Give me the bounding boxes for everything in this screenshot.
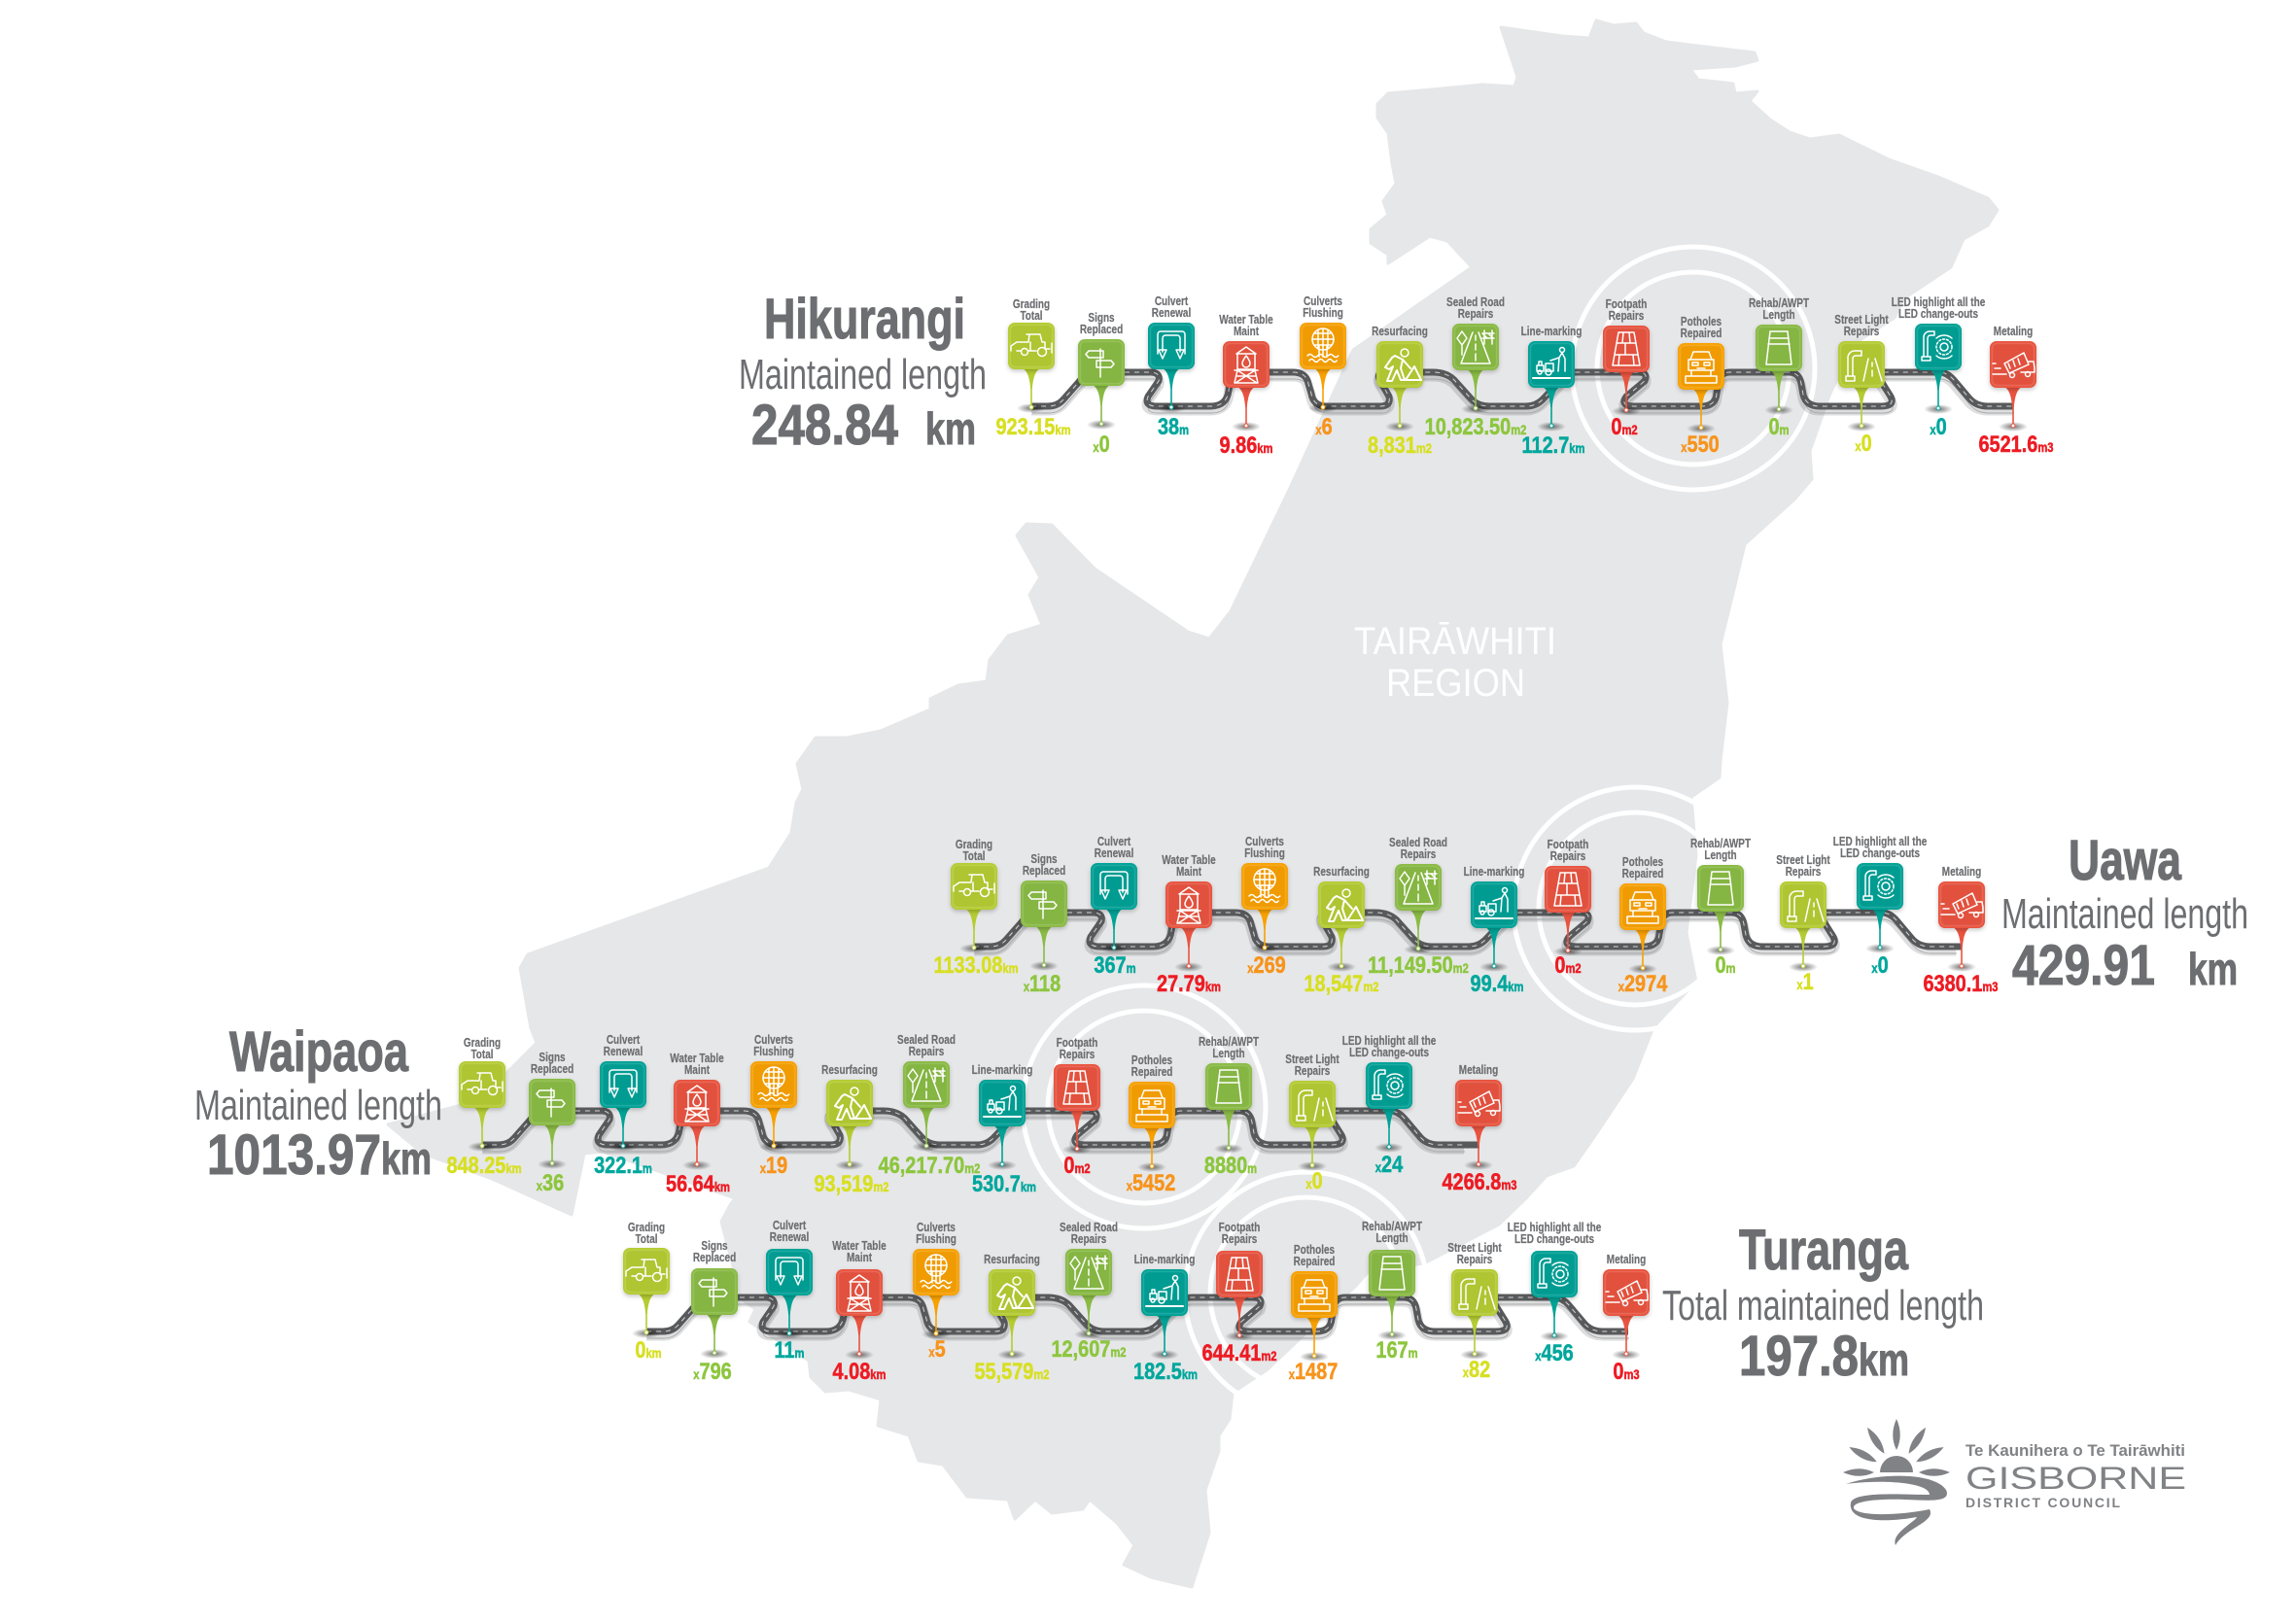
pin: Potholes Repaired: Repaired: [1131, 1066, 1172, 1079]
pin: Sealed Road Repairs: Sealed Road: [897, 1034, 956, 1047]
pin: Culvert Renewal: Renewal: [1095, 847, 1133, 860]
pin: Potholes Repaired: Potholes: [1131, 1054, 1172, 1067]
pin: Rehab/AWPT Length: Rehab/AWPT: [1690, 838, 1751, 850]
pin: Culverts Flushing: [750, 1034, 797, 1178]
pin: Culverts Flushing: Culverts: [917, 1222, 956, 1234]
pin: Metaling: Metaling: [1459, 1064, 1498, 1077]
pin: Culverts Flushing: x6: [1315, 413, 1333, 439]
pin: LED highlight: LED highlight all the: [1892, 296, 1985, 309]
pin: Sealed Road Repairs: 12,607m2: [1051, 1335, 1127, 1362]
pin: Signs Replaced: [529, 1052, 575, 1195]
pin: Grading Total: Total: [635, 1233, 658, 1246]
pin: Potholes Repaired: [1678, 316, 1724, 457]
pin: Grading Total: 0km: [635, 1336, 662, 1363]
pin: Metaling: [1978, 326, 2054, 457]
logo: Gisborne District Council: DISTRICT COUNCIL: [1966, 1495, 2120, 1510]
pin: Potholes Repaired: Repaired: [1294, 1256, 1335, 1268]
pin: Metaling: 0m3: [1613, 1358, 1640, 1384]
pin: Rehab/AWPT Length: Rehab/AWPT: [1362, 1221, 1422, 1233]
pin: Footpath Repairs: 644.41m2: [1201, 1339, 1277, 1365]
pin: Sealed Road Repairs: Repairs: [1458, 308, 1493, 321]
pin: Grading Total: [623, 1222, 670, 1363]
pin: Potholes Repaired: x2974: [1618, 970, 1668, 996]
pin: Footpath Repairs: Repairs: [1609, 310, 1644, 323]
pin: Signs Replaced: [1021, 853, 1067, 996]
pin: Signs Replaced: Signs: [1030, 853, 1058, 866]
pin: Line-marking: [1464, 866, 1524, 996]
pin: Resurfacing: 55,579m2: [974, 1358, 1050, 1384]
pin: Footpath Repairs: Footpath: [1606, 298, 1647, 311]
pin: Signs Replaced: x118: [1024, 970, 1061, 996]
pin: Signs Replaced: Signs: [1088, 312, 1115, 325]
pin: Water Table Maint: Water Table: [670, 1053, 724, 1065]
pin: Sealed Road Repairs: Repairs: [1401, 848, 1436, 861]
pin: Potholes Repaired: x1487: [1289, 1358, 1338, 1384]
pin: Rehab/AWPT Length: 8880m: [1204, 1152, 1257, 1178]
pin: Sealed Road Repairs: Sealed Road: [1389, 837, 1447, 849]
logo: Gisborne District Council: [1843, 1419, 2186, 1545]
pin: Resurfacing: 8,831m2: [1368, 432, 1432, 458]
heading: Hikurangi: Hikurangi: [764, 288, 965, 351]
pin: LED highlight: x456: [1535, 1339, 1574, 1365]
pin: Rehab/AWPT Length: Length: [1762, 309, 1795, 322]
pin: Rehab/AWPT Length: [1199, 1036, 1259, 1178]
pin: Sealed Road Repairs: [1051, 1222, 1127, 1362]
pin: LED highlight: LED highlight all the: [1508, 1222, 1601, 1234]
pin: Culverts Flushing: Flushing: [1244, 847, 1285, 860]
pin: Potholes Repaired: Potholes: [1622, 856, 1663, 869]
pin: LED highlight: x0: [1930, 413, 1947, 439]
pin: Potholes Repaired: Repaired: [1622, 868, 1663, 881]
pin: Culverts Flushing: Culverts: [1304, 295, 1342, 308]
pin: Metaling: Metaling: [1994, 326, 2033, 338]
pin: Culvert Renewal: Culvert: [607, 1034, 640, 1047]
heading: Turanga: [1662, 1219, 1984, 1388]
pin: Rehab/AWPT Length: 0m: [1715, 951, 1736, 978]
region label: REGION: [1386, 662, 1525, 705]
heading: Turanga: km: [1859, 1334, 1909, 1385]
pin: Street Light Repairs: Street Light: [1285, 1053, 1339, 1066]
pin: Sealed Road Repairs: Repairs: [909, 1046, 944, 1058]
heading: Hikurangi: 248.84: [751, 394, 898, 457]
pin: Street Light Repairs: [1285, 1053, 1339, 1193]
pin: Culverts Flushing: Culverts: [1245, 836, 1284, 848]
pin: Street Light Repairs: [1447, 1242, 1502, 1382]
pin: Water Table Maint: Water Table: [832, 1240, 887, 1253]
pin: Water Table Maint: 56.64km: [666, 1170, 730, 1196]
region label: [1354, 620, 1556, 705]
pin: Resurfacing: Resurfacing: [1372, 326, 1428, 338]
pin: Line-marking: 530.7km: [972, 1170, 1036, 1196]
heading: Hikurangi: km: [925, 403, 976, 454]
pin: Grading Total: [995, 298, 1071, 439]
pin: Sealed Road Repairs: Sealed Road: [1446, 296, 1505, 309]
pin: Grading Total: Grading: [956, 839, 992, 851]
pin: Signs Replaced: Replaced: [1023, 865, 1065, 878]
pin: Line-marking: [1133, 1254, 1198, 1384]
pin: Culverts Flushing: Flushing: [753, 1046, 794, 1058]
heading: Hikurangi: Maintained length: [739, 351, 987, 398]
pin: Signs Replaced: Replaced: [1080, 324, 1123, 336]
pin: LED highlight: [1892, 296, 1985, 439]
pin: Potholes Repaired: Potholes: [1294, 1244, 1335, 1257]
pin: Rehab/AWPT Length: [1749, 297, 1809, 439]
icon: sun and river: [1843, 1419, 1950, 1545]
pin: Culvert Renewal: [766, 1220, 813, 1363]
pin: Footpath Repairs: 0m2: [1554, 951, 1582, 978]
pin: LED highlight: [1342, 1035, 1436, 1177]
pin: Culverts Flushing: [1241, 836, 1288, 978]
highlight rings: [1023, 247, 1815, 1415]
pin: Sealed Road Repairs: [1368, 837, 1469, 978]
pin: Culverts Flushing: [1300, 295, 1346, 439]
heading: Waipaoa: Maintained length: [194, 1082, 442, 1129]
pin: Water Table Maint: [1157, 854, 1221, 996]
heading: Uawa: 429.91: [2012, 934, 2155, 997]
pin: Grading Total: [933, 839, 1019, 978]
pin: Culvert Renewal: Renewal: [770, 1231, 809, 1244]
pin: Culvert Renewal: [1091, 836, 1137, 978]
road: Waipaoa: [482, 1111, 1479, 1152]
pin: Culvert Renewal: [594, 1034, 652, 1178]
heading: Uawa: Uawa: [2069, 829, 2182, 892]
pin: Water Table Maint: [666, 1053, 730, 1196]
road: Turanga: [646, 1297, 1629, 1338]
pin: Resurfacing: 93,519m2: [814, 1170, 889, 1196]
pin: LED highlight: LED change-outs: [1840, 847, 1920, 860]
pin: LED highlight: LED highlight all the: [1833, 836, 1927, 848]
pin: Grading Total: 848.25km: [446, 1152, 522, 1178]
pin: Sealed Road Repairs: [879, 1034, 980, 1178]
pin: Grading Total: Total: [962, 850, 986, 863]
pin: Grading Total: Total: [1020, 310, 1043, 323]
pin: Footpath Repairs: Footpath: [1548, 839, 1588, 851]
pin: Water Table Maint: [1219, 314, 1273, 458]
pin: Street Light Repairs: Repairs: [1844, 326, 1879, 338]
pin: Metaling: Metaling: [1607, 1254, 1646, 1266]
pin: Metaling: 6380.1m3: [1923, 970, 1999, 996]
pin: Rehab/AWPT Length: Rehab/AWPT: [1749, 297, 1809, 310]
pin: Footpath Repairs: [1545, 839, 1591, 978]
road: Hikurangi: [1031, 372, 2014, 413]
pin: Line-marking: Line-marking: [1134, 1254, 1195, 1266]
pin: Water Table Maint: Maint: [847, 1252, 872, 1264]
pin: Rehab/AWPT Length: Length: [1212, 1048, 1245, 1060]
pin: Potholes Repaired: x5452: [1127, 1169, 1175, 1195]
heading: Waipaoa: [194, 1020, 442, 1187]
pin: LED highlight: LED change-outs: [1898, 308, 1978, 321]
pin: Signs Replaced: Replaced: [693, 1252, 736, 1264]
pin: Metaling: [1923, 866, 1999, 996]
pin: Water Table Maint: 4.08km: [833, 1358, 886, 1384]
pin: Footpath Repairs: [1603, 298, 1650, 439]
pin: Sealed Road Repairs: 46,217.70m2: [879, 1152, 980, 1178]
pin: Culverts Flushing: x269: [1247, 951, 1286, 978]
pin: Footpath Repairs: Repairs: [1060, 1049, 1095, 1061]
pin: Line-marking: [1521, 326, 1584, 458]
strip: Hikurangi: [995, 295, 2054, 458]
pin: Resurfacing: [1368, 326, 1432, 458]
pin: Potholes Repaired: Potholes: [1681, 316, 1722, 328]
pin: Street Light Repairs: x82: [1463, 1356, 1490, 1382]
heading: Uawa: [2001, 829, 2248, 997]
pin: Footpath Repairs: 0m2: [1611, 413, 1638, 439]
pin: Line-marking: Line-marking: [1464, 866, 1524, 879]
pin: Grading Total: Grading: [464, 1037, 501, 1050]
strip: Turanga: [623, 1220, 1650, 1384]
pin: Metaling: Metaling: [1942, 866, 1981, 879]
pin: Signs Replaced: Signs: [539, 1052, 566, 1064]
pin: Line-marking: Line-marking: [972, 1064, 1032, 1077]
heading: Uawa: km: [2188, 944, 2238, 994]
pin: Resurfacing: [1304, 866, 1379, 996]
pin: Resurfacing: [814, 1064, 889, 1196]
pin: Metaling: 6521.6m3: [1978, 431, 2054, 457]
pin: Street Light Repairs: Street Light: [1834, 314, 1889, 327]
pin: LED highlight: LED change-outs: [1349, 1047, 1429, 1059]
pin: Signs Replaced: x796: [693, 1358, 732, 1384]
pin: Grading Total: Grading: [628, 1222, 665, 1234]
pin: Culvert Renewal: 38m: [1158, 413, 1189, 439]
pin: Water Table Maint: Water Table: [1219, 314, 1273, 327]
pin: Sealed Road Repairs: 11,149.50m2: [1368, 951, 1469, 978]
pin: Potholes Repaired: [1618, 856, 1668, 996]
pin: Rehab/AWPT Length: [1690, 838, 1751, 978]
pin: LED highlight: x24: [1375, 1151, 1404, 1177]
pin: Line-marking: 112.7km: [1522, 432, 1584, 458]
pin: Line-marking: 99.4km: [1471, 970, 1523, 996]
pin: Street Light Repairs: [1776, 854, 1830, 994]
heading: Turanga: Turanga: [1739, 1219, 1909, 1282]
region label: TAIRĀWHITI: [1354, 620, 1556, 663]
pin: Culvert Renewal: 322.1m: [594, 1152, 652, 1178]
pin: Culverts Flushing: [913, 1222, 959, 1362]
pin: Rehab/AWPT Length: Length: [1704, 849, 1737, 862]
heading: Waipaoa: km: [381, 1133, 432, 1184]
pin: Metaling: [1603, 1254, 1650, 1384]
road: Uawa: [974, 913, 1962, 953]
pin: Potholes Repaired: [1289, 1244, 1338, 1384]
pin: Resurfacing: Resurfacing: [821, 1064, 878, 1077]
pin: Rehab/AWPT Length: 0m: [1768, 413, 1790, 439]
pin: Culvert Renewal: 11m: [774, 1336, 805, 1363]
pin: Footpath Repairs: Repairs: [1222, 1233, 1257, 1246]
pin: Resurfacing: [974, 1254, 1050, 1384]
pin: Resurfacing: Resurfacing: [984, 1254, 1040, 1266]
pin: Potholes Repaired: Repaired: [1681, 328, 1722, 340]
pin: Street Light Repairs: x0: [1305, 1167, 1323, 1193]
pin: Culvert Renewal: Culvert: [773, 1220, 806, 1232]
pin: Rehab/AWPT Length: [1362, 1221, 1422, 1363]
pin: Water Table Maint: 9.86km: [1220, 432, 1272, 458]
pin: Potholes Repaired: x550: [1681, 431, 1720, 457]
pin: Street Light Repairs: Street Light: [1776, 854, 1830, 867]
pin: Culvert Renewal: Culvert: [1097, 836, 1131, 848]
pin: Metaling: [1442, 1064, 1517, 1194]
pin: Culverts Flushing: x5: [928, 1335, 946, 1362]
pin: Footpath Repairs: Footpath: [1057, 1037, 1097, 1050]
pin: Resurfacing: Resurfacing: [1313, 866, 1370, 879]
pin: Sealed Road Repairs: 10,823.50m2: [1425, 413, 1526, 439]
pin: Culvert Renewal: 367m: [1094, 951, 1136, 978]
pin: Footpath Repairs: Footpath: [1219, 1222, 1260, 1234]
heading: Hikurangi: [739, 288, 987, 457]
pin: Line-marking: 182.5km: [1133, 1358, 1198, 1384]
pin: Culverts Flushing: Culverts: [754, 1034, 793, 1047]
pin: Footpath Repairs: [1201, 1222, 1277, 1365]
pin: LED highlight: [1833, 836, 1927, 978]
pin: LED highlight: LED change-outs: [1514, 1233, 1594, 1246]
pin: Street Light Repairs: x1: [1796, 968, 1814, 994]
pin: Culverts Flushing: Flushing: [916, 1233, 957, 1246]
map: Tairāwhiti region: [388, 20, 1998, 1587]
pin: Culvert Renewal: Culvert: [1155, 295, 1188, 308]
pin: Sealed Road Repairs: [1425, 296, 1526, 439]
pin: Water Table Maint: Maint: [1234, 326, 1259, 338]
pin: Sealed Road Repairs: Sealed Road: [1060, 1222, 1118, 1234]
pin: Grading Total: [446, 1037, 522, 1178]
pin: Street Light Repairs: Repairs: [1457, 1254, 1492, 1266]
pin: Signs Replaced: [1078, 312, 1125, 457]
pin: Rehab/AWPT Length: 167m: [1375, 1336, 1418, 1363]
pin: Signs Replaced: Signs: [701, 1240, 728, 1253]
pin: Signs Replaced: [691, 1240, 738, 1384]
pin: Signs Replaced: x0: [1093, 431, 1110, 457]
pin: Signs Replaced: Replaced: [531, 1063, 574, 1076]
pin: Potholes Repaired: [1127, 1054, 1175, 1195]
pin: Culvert Renewal: Renewal: [604, 1046, 643, 1058]
pin: Line-marking: [972, 1064, 1036, 1196]
pin: Signs Replaced: x36: [537, 1169, 564, 1195]
pin: Grading Total: 923.15km: [995, 413, 1071, 439]
pin: Water Table Maint: Water Table: [1162, 854, 1216, 867]
pin: Rehab/AWPT Length: Length: [1375, 1232, 1409, 1245]
heading: Waipaoa: 1013.97: [207, 1123, 381, 1187]
pin: Culvert Renewal: [1148, 295, 1195, 439]
heading: Waipaoa: Waipaoa: [229, 1020, 409, 1084]
pin: Sealed Road Repairs: Repairs: [1071, 1233, 1106, 1246]
pin: Metaling: 4266.8m3: [1442, 1168, 1517, 1194]
pin: Street Light Repairs: Repairs: [1786, 866, 1821, 879]
pin: Grading Total: Grading: [1013, 298, 1050, 311]
pin: Culverts Flushing: Flushing: [1303, 307, 1343, 320]
pin: Street Light Repairs: x0: [1855, 430, 1872, 456]
pin: Culvert Renewal: Renewal: [1152, 307, 1191, 320]
pin: Street Light Repairs: Repairs: [1295, 1065, 1330, 1078]
pin: Water Table Maint: [832, 1240, 887, 1384]
strip: Uawa: [933, 836, 1999, 996]
pin: Culverts Flushing: x19: [760, 1152, 787, 1178]
logo: Gisborne District Council: Te Kaunihera o Te Tairāwhiti: [1966, 1441, 2185, 1460]
pin: Water Table Maint: Maint: [684, 1064, 710, 1077]
pin: Footpath Repairs: Repairs: [1550, 850, 1585, 863]
pin: Rehab/AWPT Length: Rehab/AWPT: [1199, 1036, 1259, 1049]
pin: Grading Total: 1133.08km: [933, 951, 1019, 978]
heading: Turanga: Total maintained length: [1662, 1282, 1984, 1329]
pin: Water Table Maint: Maint: [1176, 866, 1201, 879]
pin: Footpath Repairs: 0m2: [1063, 1152, 1091, 1178]
heading: Turanga: 197.8: [1739, 1325, 1859, 1388]
pin: Street Light Repairs: Street Light: [1447, 1242, 1502, 1255]
logo: Gisborne District Council: GISBORNE: [1966, 1461, 2186, 1496]
pin: Footpath Repairs: [1054, 1037, 1100, 1178]
pin: LED highlight: [1508, 1222, 1601, 1365]
pin: Resurfacing: 18,547m2: [1304, 970, 1379, 996]
pin: LED highlight: LED highlight all the: [1342, 1035, 1436, 1048]
pin: Water Table Maint: 27.79km: [1157, 970, 1221, 996]
pin: Line-marking: Line-marking: [1521, 326, 1582, 338]
pin: LED highlight: x0: [1871, 951, 1889, 978]
pin: Street Light Repairs: [1834, 314, 1889, 456]
pin: Grading Total: Total: [470, 1049, 494, 1061]
strip: Waipaoa: [446, 1034, 1517, 1196]
